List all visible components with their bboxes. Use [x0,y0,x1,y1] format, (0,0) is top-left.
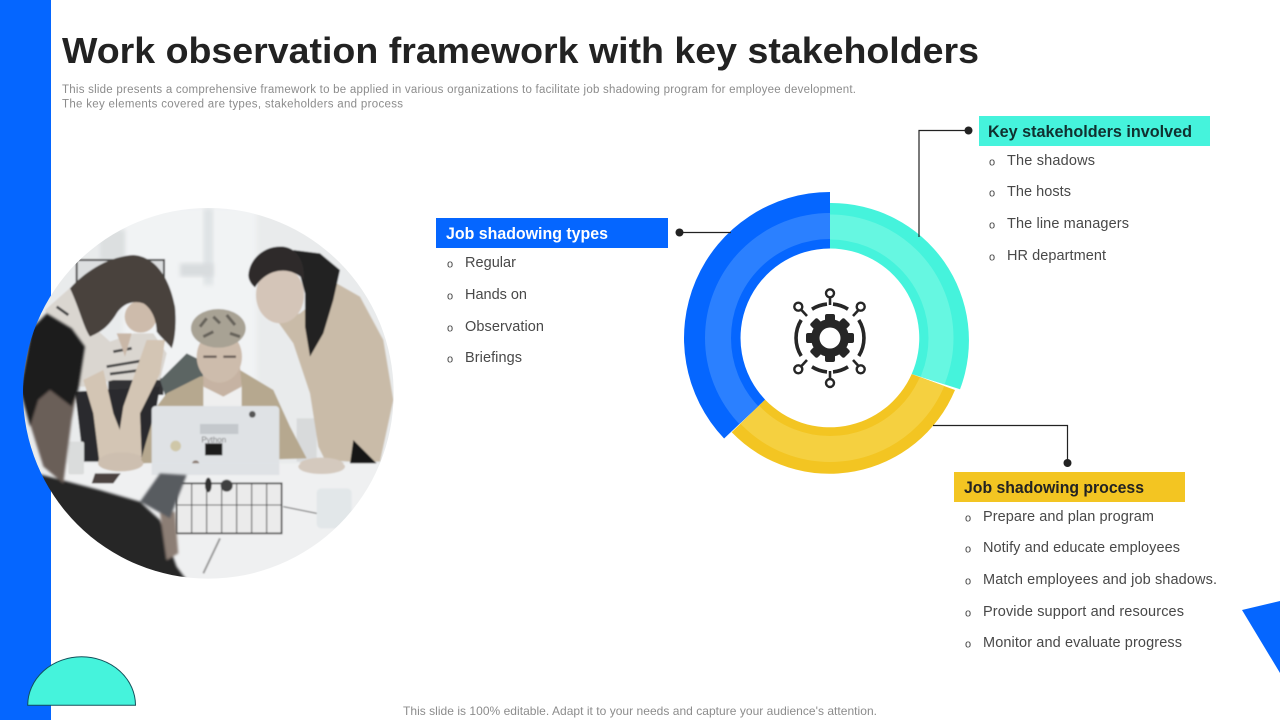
icon: central gear network [794,289,865,387]
list: stakeholders: The shadows [1007,153,1095,169]
foreground man [20,313,187,580]
list: process: o [965,608,971,620]
list: process: o [965,638,971,650]
list: stakeholders: o [989,188,995,200]
list: stakeholders: o [989,156,995,168]
list: types [447,255,544,366]
list: process: Monitor and evaluate progress [983,635,1182,651]
subtitle text [62,84,856,110]
list: process: o [965,544,971,556]
list: types: o [447,354,453,366]
wall picture [74,258,166,284]
list: types: Regular [465,255,516,271]
list: types: Observation [465,319,544,335]
list: process: o [965,576,971,588]
segment: yellow process [732,374,955,474]
list: process: Provide support and resources [983,604,1184,620]
decorative blue triangle [1242,601,1280,673]
phone on table [92,473,121,483]
panel: job shadowing process [954,472,1217,651]
list: stakeholders: The line managers [1007,216,1129,232]
heading: types [436,218,668,248]
team photo: Python [201,435,226,444]
connector: process [933,426,1072,467]
wire basket [177,478,317,573]
subtitle text: This slide presents a comprehensive framework to be applied in various organizations to facilitate job shadowing program for employee development. [62,84,856,96]
segment: blue types [684,192,830,438]
list: types: o [447,290,453,302]
list: process: Notify and educate employees [983,540,1180,556]
heading: process: Job shadowing process [964,479,1144,497]
list: types: Briefings [465,350,522,366]
laptop [150,404,280,464]
connector: stakeholders [919,126,972,237]
list: process: o [965,512,971,524]
heading: key stakeholders: Key stakeholders involved [988,123,1192,141]
mug [317,488,352,528]
left woman [75,387,160,462]
decorative teal semicircle [28,657,136,705]
list: stakeholders: o [989,252,995,264]
left blue sidebar [0,0,51,720]
list: types: o [447,258,453,270]
heading: key stakeholders [979,116,1210,146]
connector: types [676,228,731,236]
right woman [277,283,393,462]
list: process [965,509,1217,651]
list: types: o [447,322,453,334]
panel: job shadowing types [436,218,668,366]
footer note: This slide is 100% editable. Adapt it to your needs and capture your audience's attention. [403,704,877,718]
list: stakeholders: o [989,220,995,232]
subtitle text: The key elements covered are types, stakeholders and process [62,98,403,110]
heading: types: Job shadowing types [446,225,608,243]
small cup [68,442,84,474]
desk and plant background [108,378,163,395]
team photo [13,200,403,587]
list: types: Hands on [465,287,527,303]
title: Work observation framework with key stakeholders [62,30,979,71]
list: stakeholders: HR department [1007,248,1106,264]
list: stakeholders [989,153,1129,264]
center student [140,370,307,463]
list: process: Prepare and plan program [983,509,1154,525]
heading: process [954,472,1185,502]
donut chart [684,192,969,474]
table [142,462,375,466]
segment: teal stakeholders [830,203,969,390]
list: process: Match employees and job shadows. [983,572,1217,588]
panel: key stakeholders involved [979,116,1210,264]
list: stakeholders: The hosts [1007,184,1071,200]
